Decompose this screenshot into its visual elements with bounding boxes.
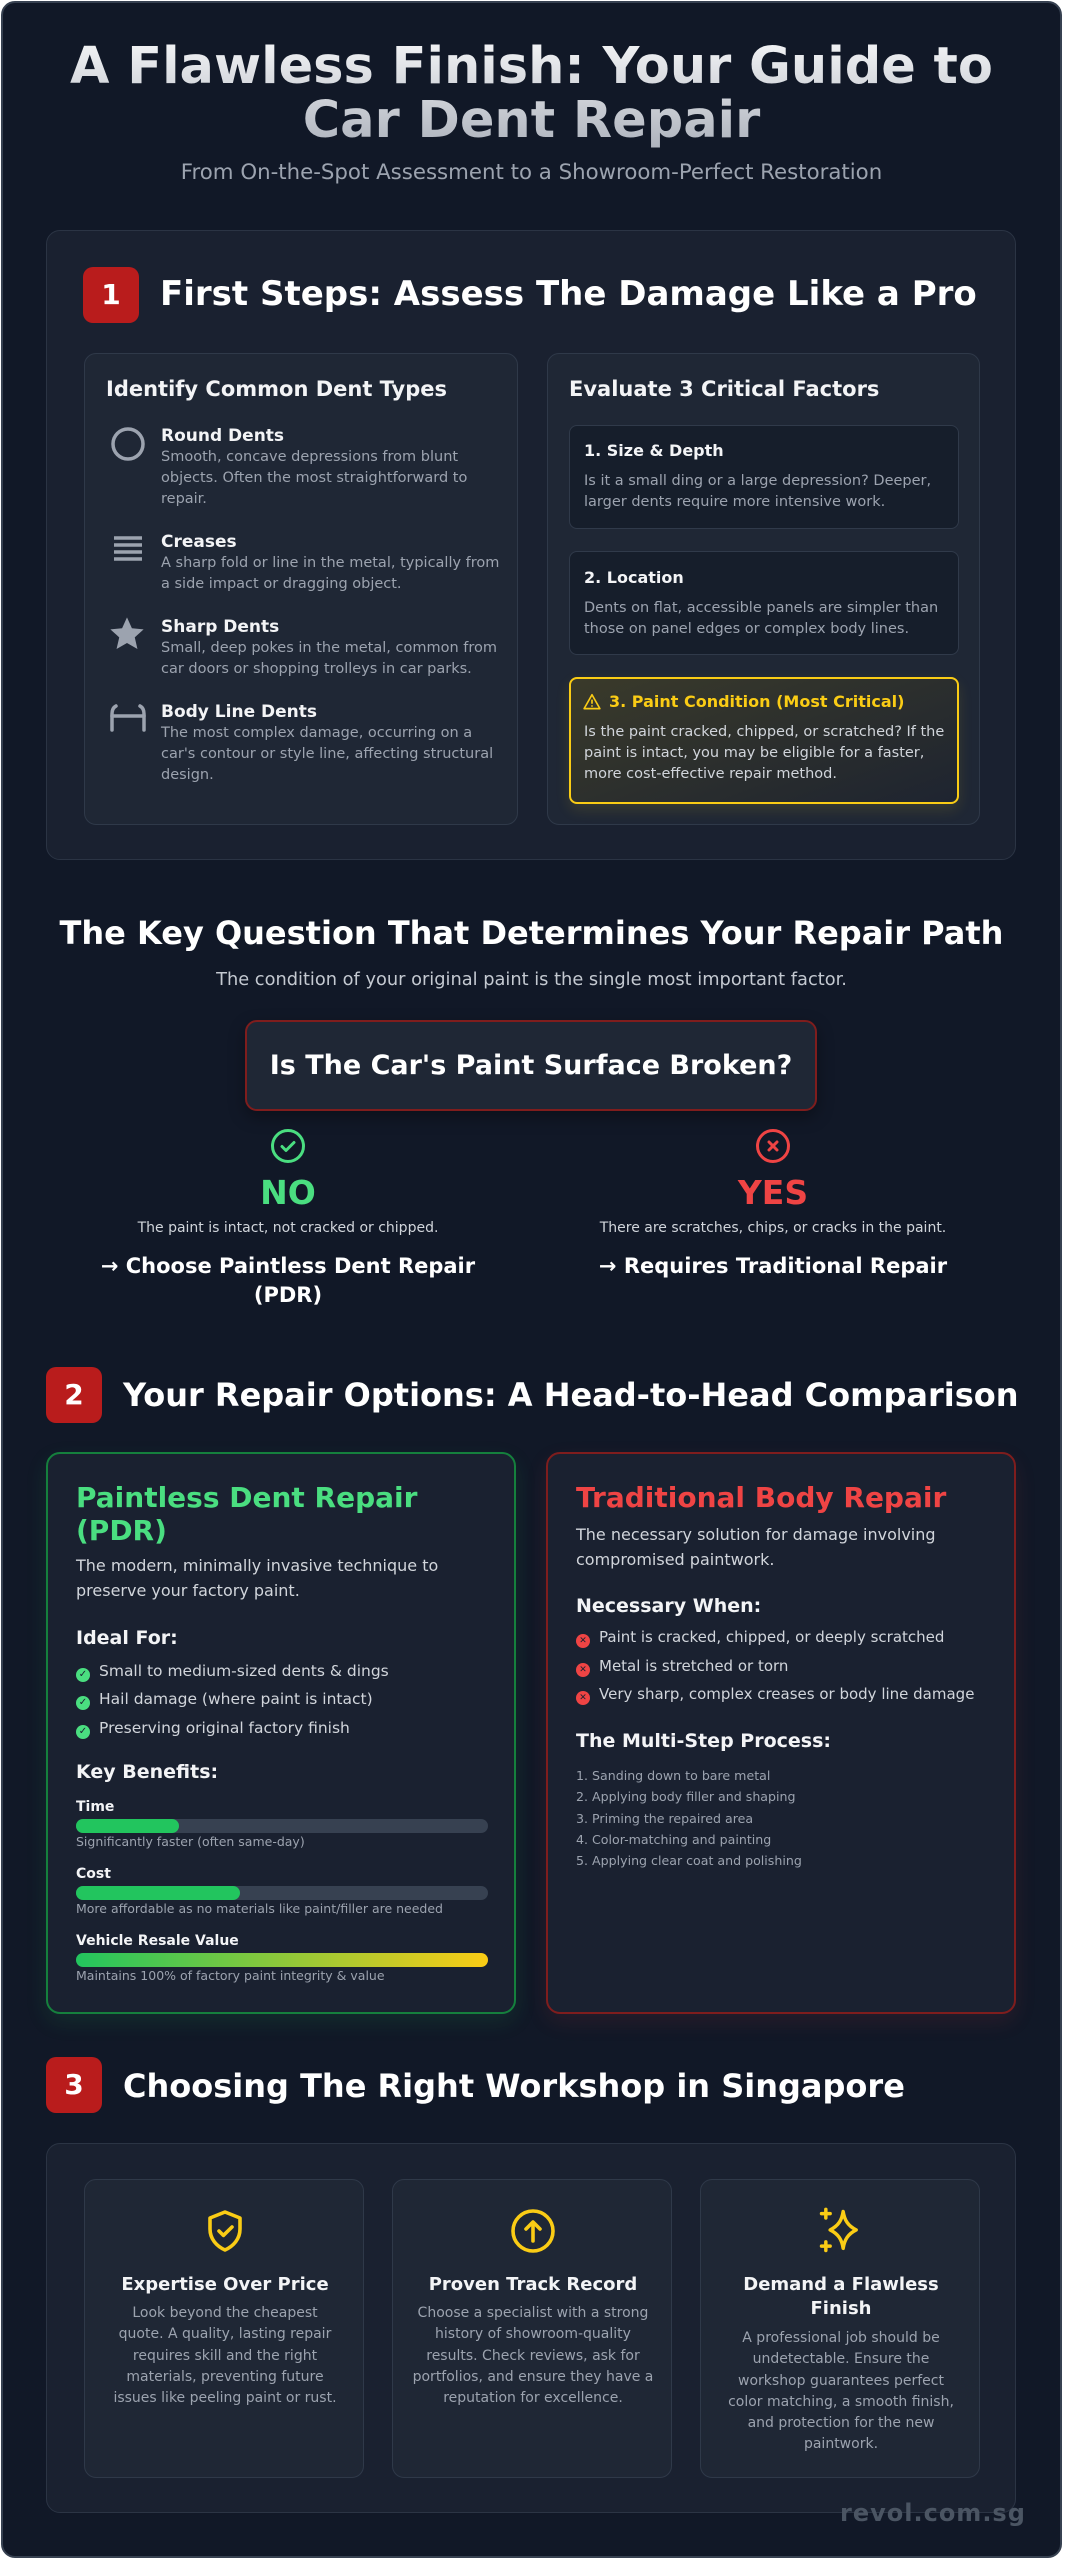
card: track record — [392, 2179, 672, 2478]
text: creases: Creases — [161, 532, 237, 552]
ideal for list: Preserving original factory finish — [99, 1719, 350, 1737]
subtext key question: The condition of your original paint is the single most important factor. — [216, 969, 847, 990]
badge 3: 3 — [64, 2068, 84, 2101]
ideal for list: Small to medium-sized dents & dings — [99, 1662, 389, 1680]
multi-step process — [576, 1730, 831, 1868]
branch: yes: → Requires Traditional Repair — [599, 1254, 947, 1278]
icon: sparkles — [820, 2208, 858, 2252]
question box: Is The Car's Paint Surface Broken? — [270, 1050, 792, 1081]
desc PDR: The modern, minimally invasive technique to preserve your factory paint. — [76, 1556, 438, 1600]
necessary when list: Very sharp, complex creases or body line damage — [599, 1685, 974, 1703]
card: expertise: Expertise Over Price — [121, 2274, 329, 2295]
branch: yes: There are scratches, chips, or cracks in the paint. — [600, 1220, 946, 1236]
card: location: 2. Location — [584, 568, 684, 587]
item: sharp dents — [110, 617, 497, 677]
text: round dents: Smooth, concave depressions from blunt objects. Often the most straightforward to repair. — [161, 449, 467, 507]
item: body line dents — [110, 702, 493, 783]
multi-step process: 3. Priming the repaired area — [576, 1811, 753, 1826]
watermark: revol.com.sg — [840, 2499, 1026, 2527]
text: sharp dents — [161, 617, 497, 677]
subheading dent types: Identify Common Dent Types — [106, 377, 447, 401]
text: round dents: Round Dents — [161, 426, 284, 446]
branch: no: → Choose Paintless Dent Repair (PDR) — [101, 1254, 475, 1307]
ideal for list: ✓ — [79, 1669, 87, 1680]
card: paint condition: Is the paint cracked, chipped, or scratched? If the paint is intact, you may be eligible for a faster, more cost-effective repair method. — [584, 724, 944, 782]
ideal for list: ✓ — [79, 1697, 87, 1708]
key benefits heading: Key Benefits: — [76, 1761, 218, 1783]
necessary when list: ✕ — [579, 1636, 587, 1646]
multi-step process: 5. Applying clear coat and polishing — [576, 1853, 802, 1868]
icon: warning — [583, 694, 601, 710]
card: flawless finish: Demand a Flawless Finish — [743, 2274, 939, 2319]
ideal for list: Hail damage (where paint is intact) — [99, 1690, 373, 1708]
item: creases — [114, 532, 499, 592]
card: size & depth: Is it a small ding or a large depression? Deeper, larger dents require more intensive work. — [584, 473, 931, 510]
icon: body line — [110, 704, 146, 732]
icon: arrow up circle — [511, 2209, 555, 2253]
necessary when list — [576, 1595, 974, 1705]
bar: time: Significantly faster (often same-day) — [76, 1834, 305, 1849]
text: creases — [161, 532, 499, 592]
bar: time — [76, 1799, 488, 1849]
heading 2: Your Repair Options: A Head-to-Head Comparison — [123, 1376, 1019, 1414]
icon: shield — [208, 2210, 242, 2252]
card: paint condition — [569, 677, 959, 804]
card: track record: Choose a specialist with a strong history of showroom-quality results. Check reviews, ask for portfolios, and ensure they have a reputation for excellence. — [413, 2305, 653, 2406]
title PDR: Paintless Dent Repair (PDR) — [76, 1481, 417, 1547]
title: Car Dent Repair — [303, 91, 760, 150]
card: location: Dents on flat, accessible panels are simpler than those on panel edges or complex body lines. — [584, 600, 938, 637]
question box — [245, 1020, 817, 1111]
bar: resale value: Maintains 100% of factory paint integrity & value — [76, 1968, 385, 1983]
card: flawless finish: A professional job should be undetectable. Ensure the workshop guarantees perfect color matching, a smooth finish, and protection for the new paintwork. — [728, 2330, 954, 2452]
bar: resale value: Vehicle Resale Value — [76, 1933, 239, 1949]
panel: PDR — [46, 1452, 516, 2014]
icon: lines — [114, 536, 142, 561]
bar: resale value — [76, 1933, 488, 1983]
badge 1 — [83, 267, 139, 323]
card: size & depth — [569, 425, 959, 529]
branch: no: NO — [260, 1173, 316, 1212]
necessary when list: ✕ — [579, 1693, 587, 1703]
ideal for list: ✓ — [79, 1726, 87, 1737]
necessary when list: Metal is stretched or torn — [599, 1657, 788, 1675]
branch: yes — [599, 1129, 948, 1278]
icon: check circle — [271, 1129, 305, 1163]
heading 1: First Steps: Assess The Damage Like a Pro — [160, 274, 977, 314]
branch: yes: YES — [738, 1173, 808, 1212]
card: size & depth: 1. Size & Depth — [584, 441, 724, 460]
text: body line dents: The most complex damage, occurring on a car's contour or style line, affecting structural design. — [161, 725, 493, 783]
icon: circle — [111, 427, 145, 461]
icon: star — [110, 618, 144, 649]
card: location — [569, 551, 959, 655]
heading 3: Choosing The Right Workshop in Singapore — [123, 2067, 905, 2105]
panel: section 1 assess damage — [46, 230, 1016, 860]
panel: workshop — [46, 2143, 1016, 2513]
text: body line dents: Body Line Dents — [161, 702, 317, 722]
branch: no — [101, 1129, 476, 1307]
multi-step process: 2. Applying body filler and shaping — [576, 1789, 796, 1804]
ideal for list — [76, 1627, 389, 1739]
badge 2 — [46, 1367, 102, 1423]
subtitle: From On-the-Spot Assessment to a Showroom-Perfect Restoration — [181, 160, 882, 185]
card: expertise — [84, 2179, 364, 2478]
icon: x circle — [756, 1129, 790, 1163]
badge 2: 2 — [64, 1378, 84, 1411]
title — [0, 40, 1063, 148]
necessary when list: Necessary When: — [576, 1595, 761, 1617]
text: sharp dents: Sharp Dents — [161, 617, 279, 637]
multi-step process: The Multi-Step Process: — [576, 1730, 831, 1752]
text: creases: A sharp fold or line in the metal, typically from a side impact or dragging object. — [161, 555, 499, 592]
card: expertise: Look beyond the cheapest quote. A quality, lasting repair requires skill and the right materials, preventing future issues like peeling paint or rust. — [113, 2305, 337, 2406]
title traditional: Traditional Body Repair — [576, 1481, 946, 1514]
panel: traditional — [546, 1452, 1016, 2014]
ideal for list: Ideal For: — [76, 1627, 178, 1649]
badge 1: 1 — [101, 278, 121, 311]
desc traditional: The necessary solution for damage involving compromised paintwork. — [576, 1525, 936, 1569]
bar: cost — [76, 1866, 488, 1916]
card: flawless finish — [700, 2179, 980, 2478]
subheading factors: Evaluate 3 Critical Factors — [569, 377, 879, 401]
bar: time: Time — [76, 1799, 114, 1815]
necessary when list: ✕ — [579, 1665, 587, 1675]
text: sharp dents: Small, deep pokes in the metal, common from car doors or shopping trolleys in car parks. — [161, 640, 497, 677]
heading: key question: The Key Question That Determines Your Repair Path — [60, 914, 1003, 952]
bar: cost: Cost — [76, 1866, 111, 1882]
card: track record: Proven Track Record — [429, 2274, 637, 2295]
badge 3 — [46, 2057, 102, 2113]
branch: no: The paint is intact, not cracked or chipped. — [138, 1220, 438, 1236]
multi-step process: 1. Sanding down to bare metal — [576, 1768, 770, 1783]
subpanel: dent types — [84, 353, 518, 825]
item: round dents — [111, 426, 467, 507]
card: paint condition: 3. Paint Condition (Most Critical) — [609, 692, 904, 711]
multi-step process: 4. Color-matching and painting — [576, 1832, 771, 1847]
subpanel: critical factors — [547, 353, 980, 825]
necessary when list: Paint is cracked, chipped, or deeply scratched — [599, 1628, 944, 1646]
title: A Flawless Finish: Your Guide to — [70, 37, 993, 96]
bar: cost: More affordable as no materials like paint/filler are needed — [76, 1901, 443, 1916]
